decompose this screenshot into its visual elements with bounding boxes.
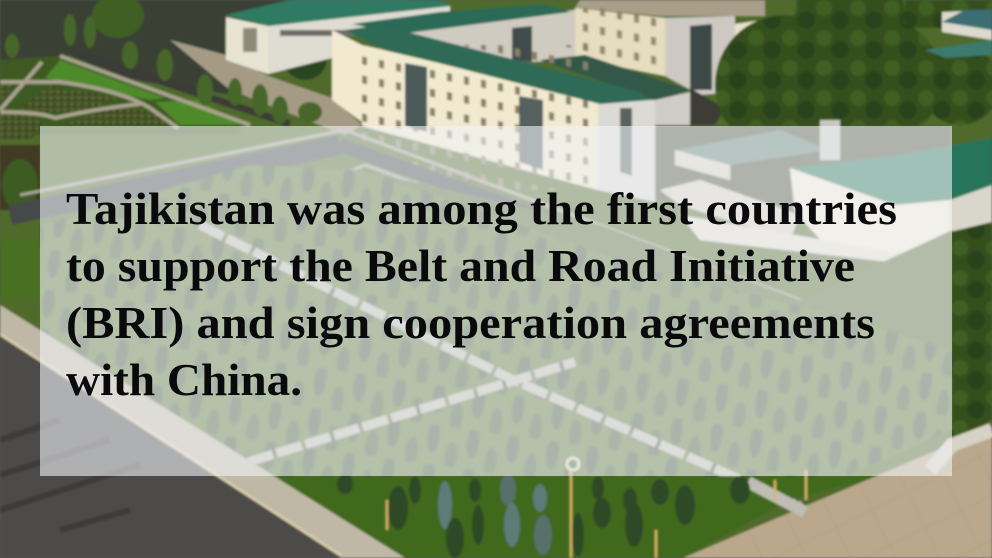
second block, top centre bbox=[352, 4, 575, 62]
right building with green roof bbox=[680, 138, 992, 262]
plaza bottom right bbox=[683, 427, 992, 558]
mid right low building bbox=[655, 120, 950, 240]
light curb bbox=[20, 130, 800, 320]
upper-left garden lawn bbox=[0, 52, 290, 140]
translucent text panel bbox=[40, 126, 952, 476]
headline text: with China. bbox=[66, 354, 302, 405]
garden paving path bbox=[200, 225, 800, 506]
saplings in lower lawn bbox=[337, 474, 750, 558]
top right small building bbox=[925, 10, 992, 58]
headline text bbox=[66, 183, 897, 405]
sidewalk bbox=[0, 305, 405, 558]
fence along garden bbox=[72, 52, 290, 124]
upper left street and dark background bbox=[0, 0, 440, 110]
lamp posts bbox=[387, 458, 806, 558]
main white building bbox=[332, 25, 655, 202]
bright lower lawn bbox=[275, 476, 880, 558]
upper lawn under panel bbox=[370, 172, 952, 350]
central tree lawn bbox=[40, 165, 952, 558]
flowerbed and trees at left edge bbox=[0, 145, 40, 300]
top middle building bbox=[575, 0, 790, 95]
dark connecting roof bbox=[540, 55, 690, 100]
headline text: to support the Belt and Road Initiative bbox=[66, 240, 855, 291]
garden trees bbox=[5, 0, 327, 124]
headline text: (BRI) and sign cooperation agreements bbox=[66, 297, 875, 348]
right side shrubs bbox=[950, 222, 992, 440]
road bbox=[0, 336, 342, 558]
avenue lines in park bbox=[10, 145, 800, 310]
large trees, top right bbox=[715, 0, 992, 155]
plaza behind garden bbox=[170, 40, 362, 135]
far building with green roof bbox=[225, 0, 450, 74]
headline text: Tajikistan was among the first countries bbox=[66, 183, 897, 234]
